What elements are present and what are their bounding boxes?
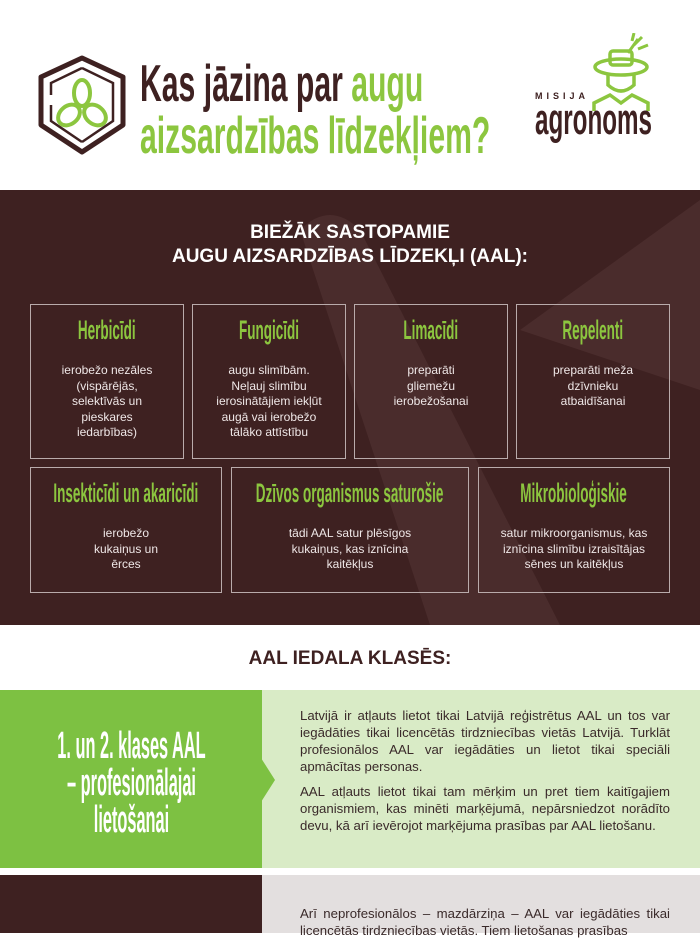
class text [300,708,670,833]
card: Mikrobiologiskie: iznīcina slimību izraisītājas [503,542,645,556]
card: Dzivos organismus: kaitēkļus [327,557,373,571]
heading [172,220,528,267]
card: Herbicidi: ierobežo nezāles [62,363,152,377]
card: Herbicidi: selektīvās un [72,394,142,408]
panel: class 1 and 2 [0,690,700,868]
heading: BIEŽĀK SASTOPAMIE [250,222,450,243]
card: Repelenti: Repelenti [563,315,623,345]
card: Repelenti [516,304,670,459]
card: Mikrobiologiskie [478,467,670,593]
heading: classes: AAL IEDALA KLASĒS: [249,648,451,669]
card: Insekticidi: ierobežo [103,526,149,540]
card: Insekticidi [30,467,222,593]
card: Herbicidi [30,304,184,459]
panel: common AAL [0,190,700,625]
card: Mikrobiologiskie: satur mikroorganismus, kas [501,526,647,540]
card: Fungicidi: ierosinātājiem iekļūt [216,394,322,408]
panel: class 3 [0,875,700,933]
card: Herbicidi: iedarbības) [77,425,137,439]
class title: lietošanai [93,799,169,841]
card: Insekticidi: ērces [111,557,141,571]
title [140,55,490,165]
card: Fungicidi: Neļauj slimību [231,378,307,392]
card: Limacidi [354,304,508,459]
class title [57,725,206,841]
class 3 text: Arī neprofesionālos – mazdārziņa – AAL var iegādāties tikai licencētās tirdzniecības vietās. Tiem lietošanas prasības [300,906,670,938]
card: Mikrobiologiskie: Mikrobioloģiskie [521,478,627,508]
card: Limacidi: ierobežošanai [394,394,468,408]
card: Limacidi: Limacīdi [404,315,458,345]
class title: 1. un 2. klases AAL [57,725,205,767]
card: Insekticidi: Insekticīdi un akaricīdi [54,478,198,508]
heading: AUGU AIZSARDZĪBAS LĪDZEKĻI (AAL): [172,246,528,267]
class title: – profesionālajai [67,762,195,804]
card: Dzivos organismus [231,467,469,593]
header [38,33,652,165]
card: Herbicidi: (vispārējās, [76,378,138,392]
card: Fungicidi: augu slimībām. [228,363,310,377]
card: Herbicidi: Herbicīdi [78,315,136,345]
card: Dzivos organismus: kukaiņus, kas iznīcina [292,542,408,556]
card: Dzivos organismus: Dzīvos organismus saturošie [256,478,444,508]
card: Herbicidi: pieskares [81,410,133,424]
title: aizsardzības līdzekļiem? [140,107,490,165]
card: Mikrobiologiskie: sēnes un kaitēkļus [525,557,623,571]
card: Repelenti: dzīvnieku [568,378,618,392]
title: Kas jāzina par augu [140,55,423,113]
icon: shield logo [38,56,126,154]
card: Limacidi: gliemežu [407,378,455,392]
card: Fungicidi: augā vai ierobežo [222,410,316,424]
card: Repelenti: atbaidīšanai [561,394,625,408]
card: Dzivos organismus: tādi AAL satur plēsīgos [289,526,411,540]
card: Repelenti: preparāti meža [553,363,633,377]
card: Fungicidi: tālāko attīstību [230,425,308,439]
card: Fungicidi [192,304,346,459]
card: Insekticidi: kukaiņus un [94,542,158,556]
class text: AAL atļauts lietot tikai tam mērķim un pret tiem kaitīgajiem organismiem, kas minēti marķējumā, nepārsniedzot norādīto devu, kā arī ievērojot marķējuma prasības par AAL lietošanu. [300,784,670,833]
card: Limacidi: preparāti [407,363,455,377]
class text: Latvijā ir atļauts lietot tikai Latvijā reģistrētus AAL un tos var iegādāties tikai licencētās tirdzniecības vietās Latvijā. Turklāt profesionālos AAL var iegādāties un lietot tikai speciāli apmācītas personas. [300,708,670,774]
logo: misija agronoms: MISIJA [535,91,589,101]
logo: misija agronoms [535,33,652,144]
logo: misija agronoms: agronoms [535,95,652,144]
card: Fungicidi: Fungicīdi [239,315,299,345]
